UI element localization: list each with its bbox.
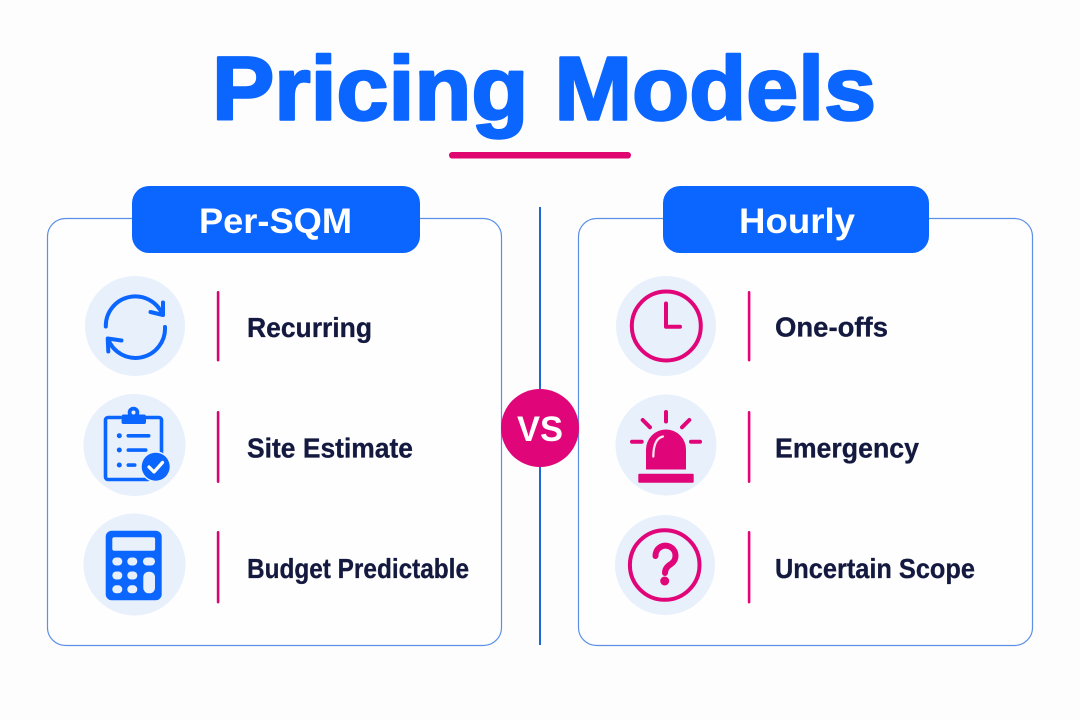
row: Site Estimate [84, 394, 413, 496]
panel: Per-SQM [48, 186, 502, 646]
icon: question mark [630, 530, 700, 600]
icon: calculator [106, 531, 162, 600]
row: Uncertain Scope [615, 515, 975, 615]
row: Emergency [616, 394, 920, 496]
title: Pricing Models [212, 40, 876, 140]
badge: Hourly: Hourly [739, 202, 856, 241]
row: Uncertain Scope: Uncertain Scope [775, 553, 975, 584]
row: Recurring [85, 276, 372, 376]
VS badge [501, 389, 579, 467]
row: One-offs: One-offs [775, 312, 888, 342]
badge: Hourly [663, 186, 929, 253]
row: One-offs [616, 276, 888, 376]
center divider line [539, 207, 541, 645]
row: Budget Predictable [84, 514, 469, 616]
row: Emergency: Emergency [775, 432, 920, 464]
icon: recurring arrows [106, 296, 165, 358]
row: Budget Predictable: Budget Predictable [247, 553, 469, 584]
panel: Hourly [578, 186, 1032, 646]
title underline [449, 152, 631, 158]
row: Site Estimate: Site Estimate [247, 432, 413, 464]
row: Recurring: Recurring [247, 312, 372, 343]
badge: Per-SQM: Per-SQM [199, 202, 352, 241]
VS badge: VS [517, 410, 563, 449]
icon: clipboard with check [106, 407, 171, 482]
badge: Per-SQM [132, 186, 420, 253]
icon: clock [632, 292, 701, 360]
icon: siren [632, 412, 700, 483]
